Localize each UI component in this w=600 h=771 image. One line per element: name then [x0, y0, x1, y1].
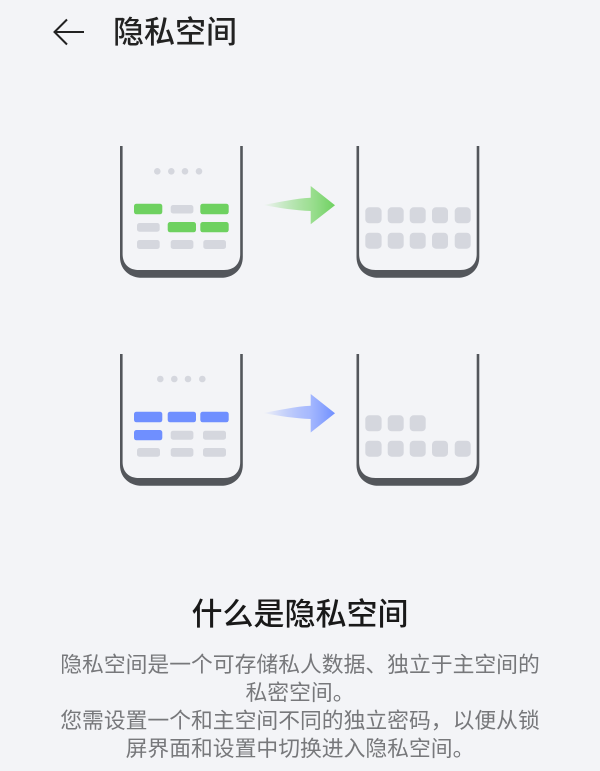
arrow: green	[263, 186, 335, 224]
description text: 屏界面和设置中切换进入隐私空间。	[126, 736, 474, 761]
section heading: 什么是隐私空间	[192, 597, 408, 632]
description text: 私密空间。	[246, 680, 354, 705]
arrow: blue	[263, 394, 335, 432]
phone: bottom right with partial grid	[356, 354, 479, 486]
icon: back arrow	[54, 20, 84, 44]
phone: top left with green items	[120, 146, 243, 278]
phone: bottom left with blue items	[120, 354, 243, 486]
description text: 您需设置一个和主空间不同的独立密码，以便从锁	[60, 708, 540, 733]
header title: 隐私空间	[113, 15, 237, 50]
description text	[60, 652, 540, 761]
description text: 隐私空间是一个可存储私人数据、独立于主空间的	[60, 652, 540, 677]
phone: top right with gray grid	[356, 146, 479, 278]
